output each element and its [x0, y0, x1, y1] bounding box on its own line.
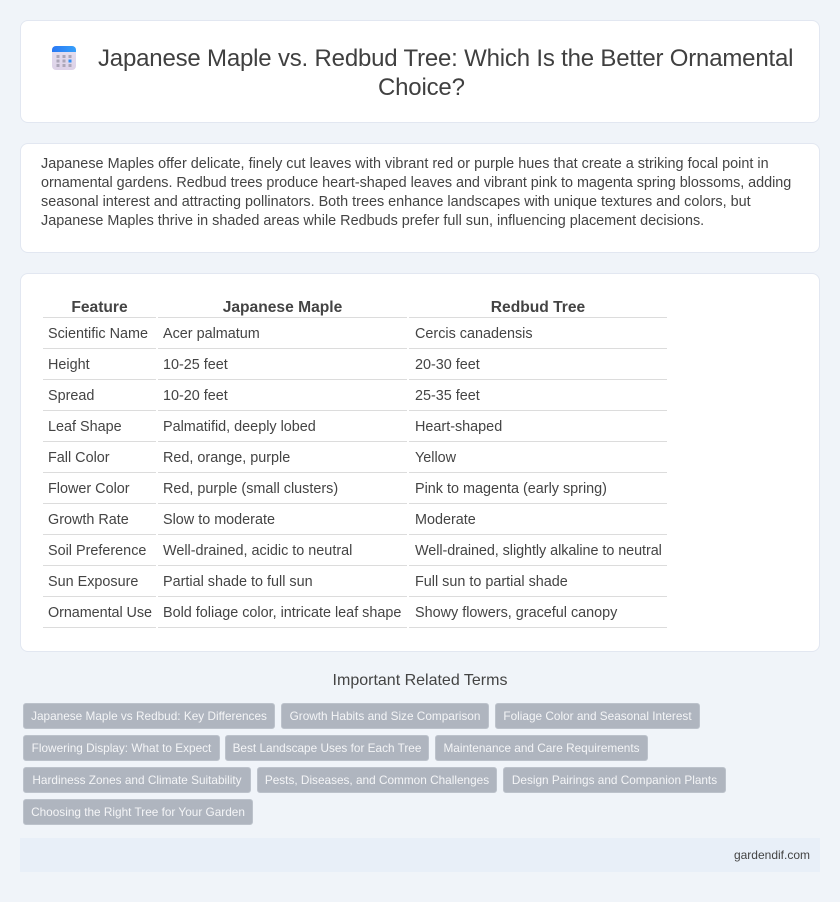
table header: Feature	[71, 299, 128, 316]
comparison table: Well-drained, acidic to neutral	[163, 543, 352, 559]
comparison table: Yellow	[415, 450, 456, 466]
comparison table: Red, orange, purple	[163, 450, 290, 466]
icon: calendar	[52, 46, 76, 70]
table header: Redbud Tree	[491, 299, 585, 316]
panel: introduction	[20, 143, 820, 253]
panel: title header	[20, 20, 820, 123]
comparison table: Palmatifid, deeply lobed	[163, 419, 316, 435]
comparison table: Showy flowers, graceful canopy	[415, 605, 617, 621]
related term tags: Flowering Display: What to Expect	[32, 741, 211, 755]
table header: Japanese Maple	[223, 299, 342, 316]
related term tags: Japanese Maple vs Redbud: Key Differences	[31, 709, 267, 723]
comparison table: Sun Exposure	[48, 574, 138, 590]
comparison table: 25-35 feet	[415, 388, 480, 404]
footer: gardendif.com	[734, 848, 810, 862]
comparison table: 10-25 feet	[163, 357, 228, 373]
comparison table: Well-drained, slightly alkaline to neutral	[415, 543, 662, 559]
panel: comparison table	[20, 273, 820, 652]
comparison table: Bold foliage color, intricate leaf shape	[163, 605, 401, 621]
comparison table: 20-30 feet	[415, 357, 480, 373]
text block: introduction	[41, 156, 791, 229]
comparison table: Pink to magenta (early spring)	[415, 481, 607, 497]
comparison table: Scientific Name	[48, 326, 148, 342]
related term tags: Design Pairings and Companion Plants	[512, 773, 717, 787]
comparison table: Soil Preference	[48, 543, 146, 559]
related term tags: Growth Habits and Size Comparison	[290, 709, 480, 723]
title	[98, 45, 793, 101]
comparison table: 10-20 feet	[163, 388, 228, 404]
text block: introduction: ornamental gardens. Redbud trees produce heart-shaped leaves and vibrant pink to magenta spring blossoms, adding	[41, 175, 791, 191]
comparison table: Leaf Shape	[48, 419, 122, 435]
comparison table: Partial shade to full sun	[163, 574, 313, 590]
comparison table: Moderate	[415, 512, 476, 528]
related term tags: Choosing the Right Tree for Your Garden	[31, 805, 245, 819]
comparison table: Red, purple (small clusters)	[163, 481, 338, 497]
related term tags: Best Landscape Uses for Each Tree	[233, 741, 421, 755]
comparison table: Spread	[48, 388, 94, 404]
related term tags: Pests, Diseases, and Common Challenges	[265, 773, 489, 787]
comparison table: Ornamental Use	[48, 605, 152, 621]
comparison table: Growth Rate	[48, 512, 129, 528]
related term tags: Hardiness Zones and Climate Suitability	[32, 773, 242, 787]
table header	[71, 299, 585, 316]
comparison table: Height	[48, 357, 90, 373]
comparison table: Heart-shaped	[415, 419, 502, 435]
comparison table: Slow to moderate	[163, 512, 275, 528]
comparison table: Cercis canadensis	[415, 326, 533, 342]
title: Japanese Maple vs. Redbud Tree: Which Is the Better Ornamental	[98, 45, 793, 72]
comparison table: Full sun to partial shade	[415, 574, 568, 590]
comparison table: Flower Color	[48, 481, 130, 497]
text block: introduction: Japanese Maples offer delicate, finely cut leaves with vibrant red or purple hues that create a striking focal point in	[41, 156, 769, 172]
comparison table: Acer palmatum	[163, 326, 260, 342]
heading: related terms: Important Related Terms	[333, 672, 507, 689]
comparison table: Fall Color	[48, 450, 110, 466]
related term tags: Foliage Color and Seasonal Interest	[503, 709, 692, 723]
related term tags	[23, 703, 726, 825]
text block: introduction: seasonal interest and attracting pollinators. Both trees enhance landscapes with unique textures and colors, but	[41, 194, 751, 210]
text block: introduction: Japanese Maples thrive in shaded areas while Redbuds prefer full sun, influencing placement decisions.	[41, 213, 704, 229]
title: Choice?	[378, 74, 465, 101]
footer	[20, 838, 820, 872]
related term tags: Maintenance and Care Requirements	[443, 741, 640, 755]
comparison table	[43, 299, 667, 628]
